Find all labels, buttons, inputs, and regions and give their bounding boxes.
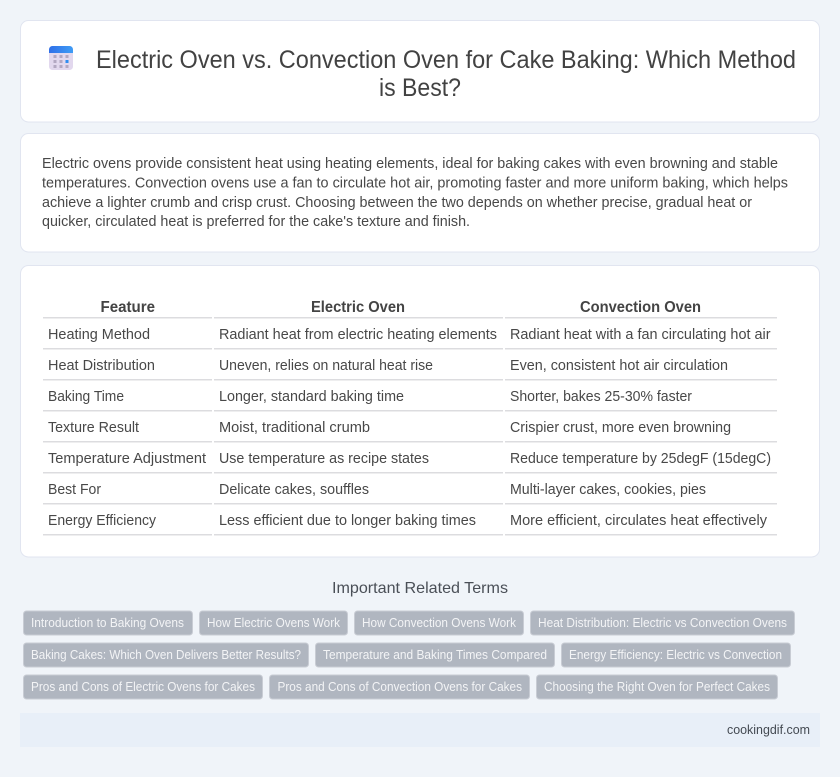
row: texture result: Texture Result bbox=[48, 420, 139, 436]
tag: Introduction to Baking Ovens bbox=[31, 616, 184, 630]
row: energy efficiency: Energy Efficiency bbox=[48, 513, 157, 529]
row: texture result: Crispier crust, more even browning bbox=[510, 420, 731, 436]
tag bbox=[24, 675, 262, 699]
tag bbox=[24, 643, 308, 667]
panel: summary paragraph bbox=[20, 134, 820, 252]
title: Electric Oven vs. Convection Oven for Cake Baking: Which Method bbox=[96, 46, 796, 74]
row: best for: Multi-layer cakes, cookies, pies bbox=[510, 482, 706, 498]
table header row: Feature bbox=[100, 299, 155, 316]
row: heating method: Radiant heat from electric heating elements bbox=[219, 327, 497, 343]
row: energy efficiency: Less efficient due to longer baking times bbox=[219, 513, 476, 529]
row: baking time bbox=[48, 389, 692, 405]
tag: Temperature and Baking Times Compared bbox=[323, 648, 547, 662]
tag: Energy Efficiency: Electric vs Convection bbox=[569, 648, 782, 662]
header card bbox=[20, 20, 820, 122]
footer: cookingdif.com bbox=[727, 722, 810, 737]
tag: Baking Cakes: Which Oven Delivers Better Results? bbox=[31, 648, 301, 662]
row: texture result: Moist, traditional crumb bbox=[219, 420, 370, 436]
row: baking time: Shorter, bakes 25-30% faster bbox=[510, 389, 692, 405]
row: temperature adjustment: Temperature Adjustment bbox=[48, 451, 206, 467]
row: best for: Delicate cakes, souffles bbox=[219, 482, 369, 498]
row: temperature adjustment: Use temperature as recipe states bbox=[219, 451, 429, 467]
tag: Pros and Cons of Electric Ovens for Cakes bbox=[31, 680, 255, 694]
row: heating method: Radiant heat with a fan circulating hot air bbox=[510, 327, 771, 343]
panel: comparison table bbox=[20, 266, 820, 557]
row: energy efficiency bbox=[48, 513, 768, 529]
tag bbox=[354, 611, 524, 635]
row: temperature adjustment bbox=[48, 451, 771, 467]
table header row: Electric Oven bbox=[311, 299, 405, 316]
row: heat distribution bbox=[48, 358, 728, 374]
row: temperature adjustment: Reduce temperature by 25degF (15degC) bbox=[510, 451, 771, 467]
row: heating method bbox=[48, 327, 771, 343]
panel: summary paragraph: temperatures. Convection ovens use a fan to circulate hot air, promoting faster and more uniform baking, which helps bbox=[42, 176, 788, 192]
tag bbox=[24, 611, 192, 635]
panel: summary paragraph: Electric ovens provide consistent heat using heating elements, ideal for baking cakes with even browning and stable bbox=[42, 156, 778, 172]
row: texture result bbox=[48, 420, 731, 436]
heading: important related terms: Important Related Terms bbox=[332, 580, 508, 597]
tag: Pros and Cons of Convection Ovens for Cakes bbox=[278, 680, 522, 694]
tag bbox=[562, 643, 790, 667]
row: best for: Best For bbox=[48, 482, 101, 498]
tag bbox=[316, 643, 554, 667]
tag bbox=[200, 611, 348, 635]
panel: summary paragraph: achieve a lighter crumb and crisp crust. Choosing between the two depends on whether precise, gradual heat or bbox=[42, 195, 752, 211]
tag bbox=[270, 675, 530, 699]
row: heat distribution: Uneven, relies on natural heat rise bbox=[219, 358, 433, 374]
row: heat distribution: Heat Distribution bbox=[48, 358, 155, 374]
icon: calendar bbox=[49, 46, 73, 70]
related term tags bbox=[24, 611, 794, 699]
tag: How Electric Ovens Work bbox=[207, 616, 341, 630]
tag: Heat Distribution: Electric vs Convection Ovens bbox=[538, 616, 787, 630]
table header row: Convection Oven bbox=[580, 299, 701, 316]
tag bbox=[536, 675, 778, 699]
row: best for bbox=[48, 482, 706, 498]
row: heating method: Heating Method bbox=[48, 327, 150, 343]
tag: Choosing the Right Oven for Perfect Cakes bbox=[544, 680, 770, 694]
row: heat distribution: Even, consistent hot air circulation bbox=[510, 358, 728, 374]
row: baking time: Baking Time bbox=[48, 389, 124, 405]
title bbox=[96, 46, 796, 102]
table header row bbox=[100, 299, 701, 316]
title: is Best? bbox=[379, 74, 461, 102]
panel: summary paragraph: quicker, circulated heat is preferred for the cake's texture and finish. bbox=[42, 214, 470, 230]
row: baking time: Longer, standard baking time bbox=[219, 389, 404, 405]
footer bbox=[20, 713, 820, 747]
tag: How Convection Ovens Work bbox=[362, 616, 517, 630]
tag bbox=[530, 611, 794, 635]
row: energy efficiency: More efficient, circulates heat effectively bbox=[510, 513, 768, 529]
